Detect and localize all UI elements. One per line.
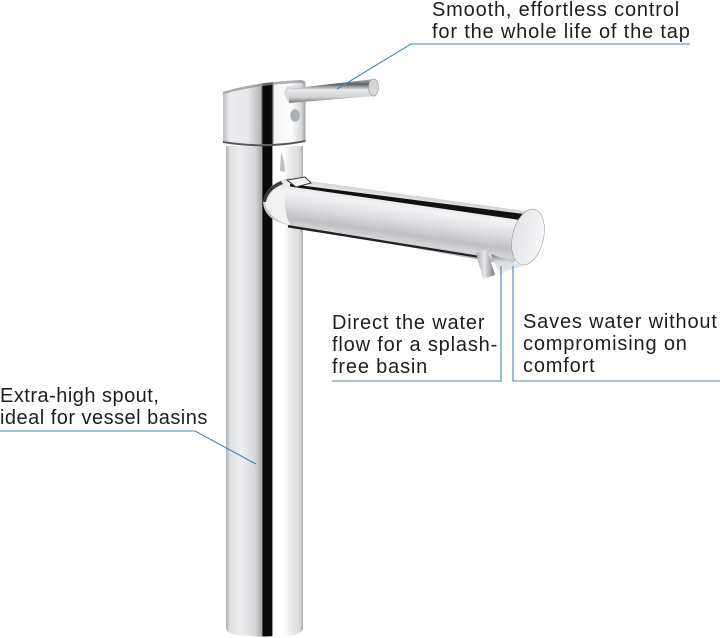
- leader: water flow: [332, 266, 501, 381]
- spout end face: [506, 206, 550, 268]
- text: saves water: [523, 311, 718, 377]
- leader: water saving: [513, 266, 720, 381]
- text: saves water: comfort: [523, 355, 596, 377]
- text: direct water flow: Direct the water: [332, 312, 485, 334]
- text: extra-high spout: [0, 385, 208, 429]
- text: saves water: Saves water without: [523, 311, 718, 333]
- text: smooth control: [432, 0, 691, 43]
- nozzle and aerator: [476, 250, 523, 279]
- text: smooth control: for the whole life of the tap: [432, 21, 691, 43]
- text: direct water flow: free basin: [332, 356, 428, 378]
- leader lines: [0, 44, 720, 464]
- leader: lever control: [337, 44, 690, 89]
- text: saves water: compromising on: [523, 333, 688, 355]
- spout: [263, 177, 532, 266]
- leader: extra-high spout: [0, 431, 256, 464]
- mixer head: [223, 80, 306, 172]
- text: extra-high spout: ideal for vessel basins: [0, 407, 208, 429]
- lever handle: [288, 79, 378, 103]
- text: extra-high spout: Extra-high spout,: [0, 385, 159, 407]
- tap body column: [226, 146, 303, 636]
- text: direct water flow: [332, 312, 498, 378]
- text: direct water flow: flow for a splash-: [332, 334, 498, 356]
